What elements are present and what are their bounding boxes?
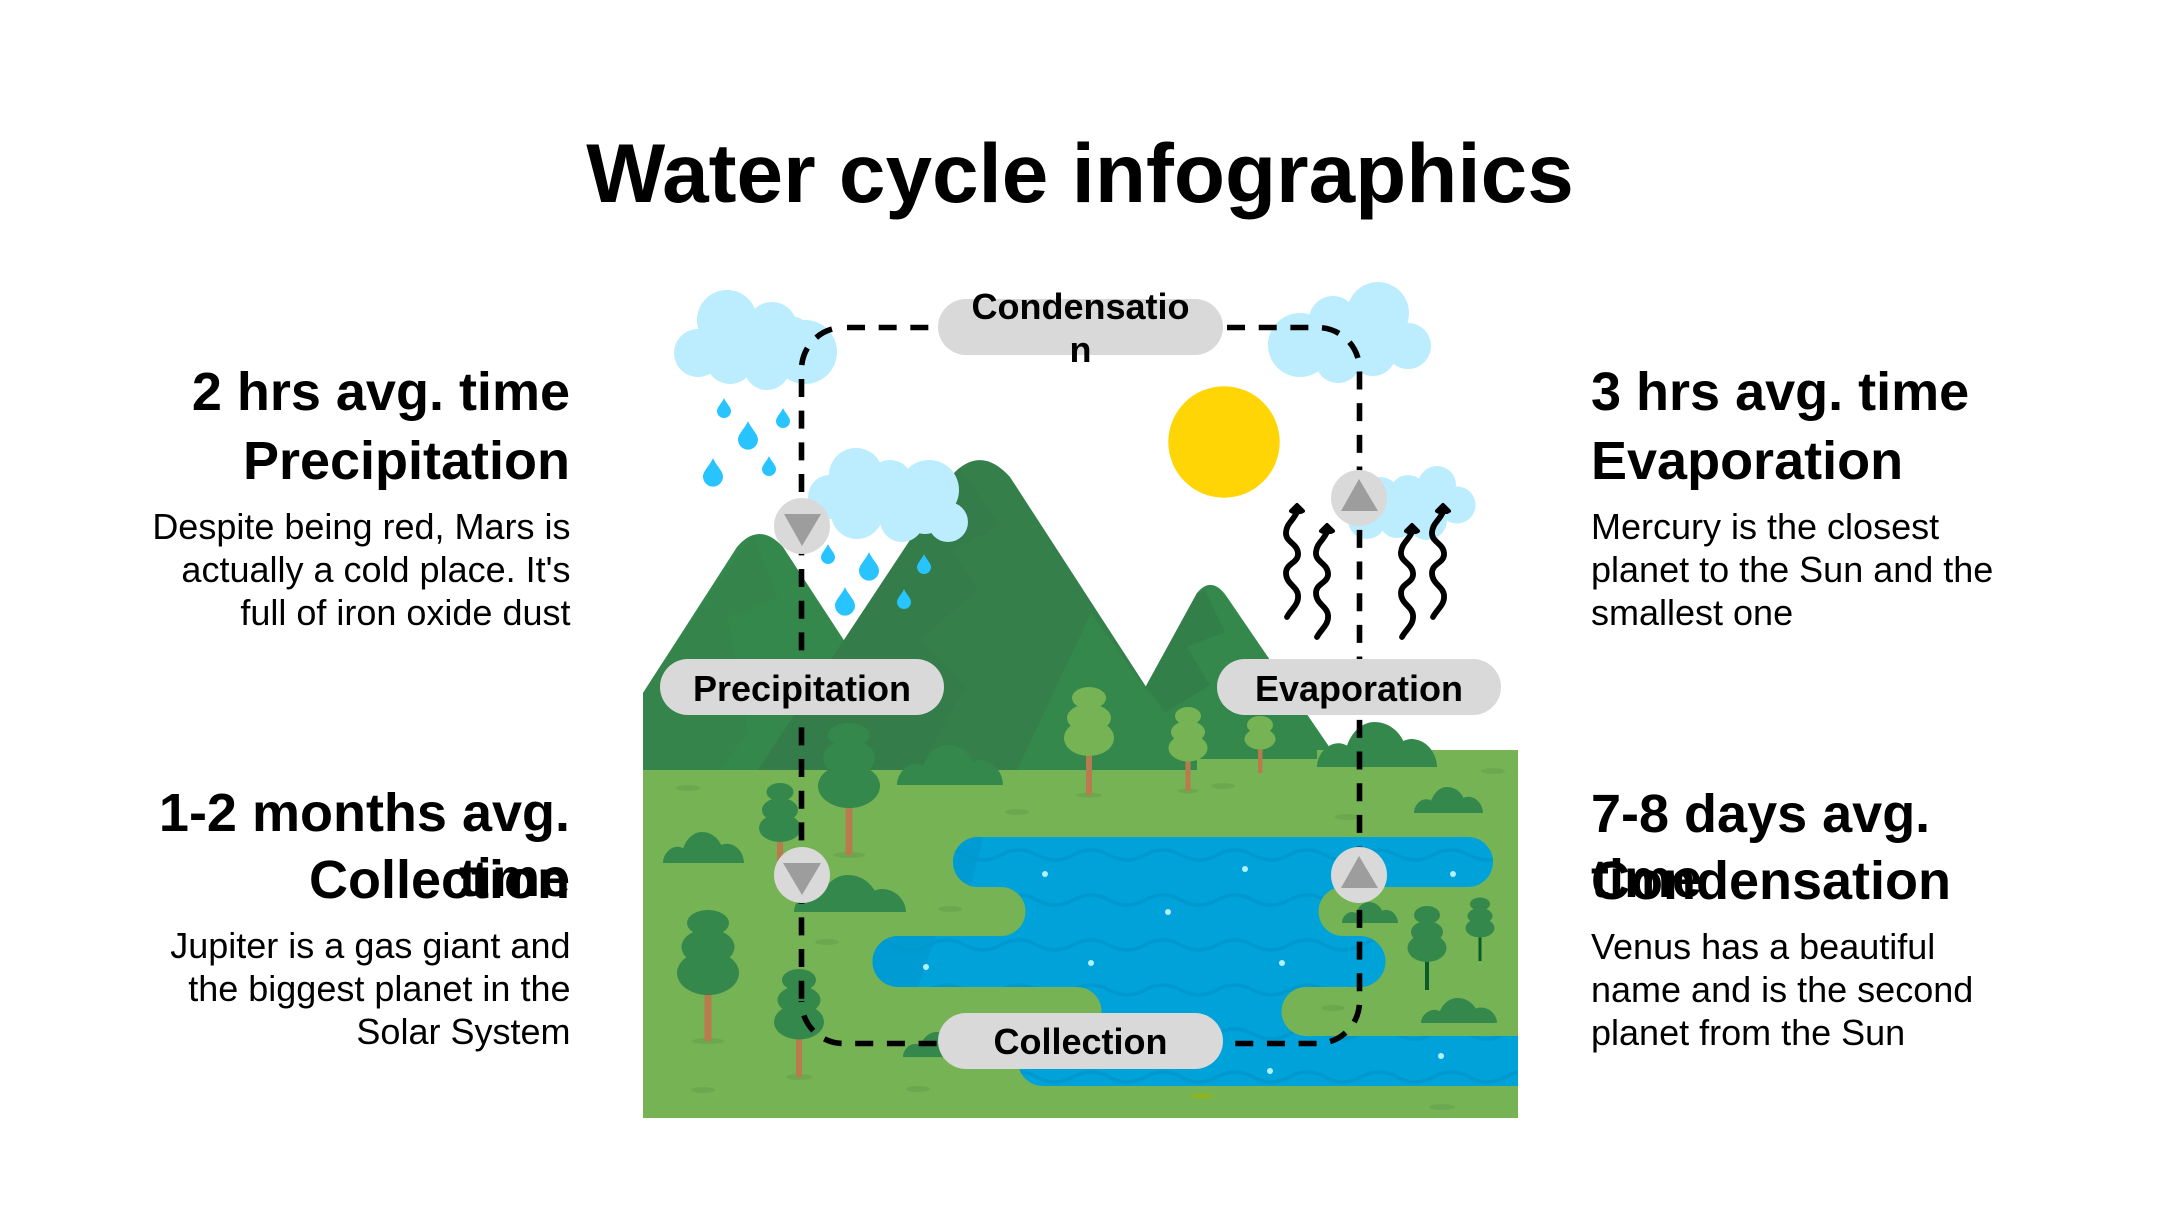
label: evaporation: Evaporation: [1255, 668, 1463, 709]
heading: precipitation time: Precipitation: [243, 431, 570, 491]
cloud: evaporation: [1348, 466, 1476, 540]
heading: condensation time: time: [1591, 849, 1702, 909]
title: Water cycle infographics: [586, 126, 1574, 220]
cloud: middle: [808, 448, 968, 542]
description: condensation: [1591, 926, 1973, 1053]
heading: precipitation time: [192, 362, 570, 491]
panel: evaporation text: [1591, 362, 1993, 633]
heading: condensation time: [1591, 784, 1951, 911]
arrow: squiggle three: [1401, 525, 1418, 637]
heading: collection time: Collection: [309, 850, 570, 910]
tree: right small: [1466, 898, 1494, 961]
heading: condensation time: Condensation: [1591, 851, 1951, 911]
heading: evaporation time: Evaporation: [1591, 431, 1903, 491]
panel: condensation text: [1591, 784, 1973, 1053]
tree: far left: [677, 910, 739, 1044]
description: precipitation: actually a cold place. It's: [181, 549, 570, 590]
label: condensation: n: [1070, 329, 1092, 370]
description: collection: Jupiter is a gas giant and: [170, 925, 570, 966]
dashed cycle path: [801, 327, 1360, 1044]
bushes: [663, 722, 1497, 1057]
ground: [643, 750, 1518, 1118]
heading: collection time: time: [459, 848, 570, 908]
description: condensation: name and is the second: [1591, 969, 1973, 1010]
raindrops: top left: [703, 398, 790, 487]
tree: tall near path: [818, 723, 880, 858]
arrow: squiggle two: [1316, 525, 1333, 637]
label: condensation: [938, 286, 1223, 370]
mountain: middle: [758, 460, 1152, 770]
heading: collection time: [159, 783, 570, 910]
description: condensation: planet from the Sun: [1591, 1012, 1905, 1053]
description: precipitation: full of iron oxide dust: [240, 592, 570, 633]
heading: condensation time: 7-8 days avg.: [1591, 784, 1930, 844]
description: evaporation: planet to the Sun and the: [1591, 549, 1993, 590]
heading: collection time: 1-2 months avg.: [159, 783, 570, 843]
tree: light three: [1244, 716, 1276, 773]
description: evaporation: smallest one: [1591, 592, 1793, 633]
description: precipitation: [152, 506, 570, 633]
heading: evaporation time: 3 hrs avg. time: [1591, 362, 1969, 422]
tree: light two: [1168, 707, 1208, 794]
description: evaporation: [1591, 506, 1993, 633]
heading: precipitation time: 2 hrs avg. time: [192, 362, 570, 422]
lake and river: [857, 830, 1541, 1086]
label: collection: Collection: [993, 1021, 1168, 1062]
tree: upper path: [759, 783, 801, 865]
heading: evaporation time: [1591, 362, 1969, 491]
cloud: top left: [674, 290, 837, 390]
label: precipitation: [660, 659, 944, 715]
label: condensation: Condensatio: [971, 286, 1190, 327]
trees: [677, 687, 1494, 1080]
tree: right large: [1408, 906, 1446, 990]
description: collection: Solar System: [356, 1011, 570, 1052]
arrow badge: condensation up: [1331, 847, 1387, 903]
panel: collection text: [159, 783, 570, 1052]
arrow badge: collection down: [774, 847, 830, 903]
label: evaporation: [1217, 659, 1501, 715]
label: collection: [938, 1013, 1223, 1069]
illustration: landscape: [643, 460, 1541, 1118]
arrow badge: evaporation up: [1331, 470, 1387, 526]
description: condensation: Venus has a beautiful: [1591, 926, 1935, 967]
evaporation squiggle arrows: [1286, 505, 1449, 637]
grass patches: [676, 768, 1505, 1110]
cloud: top right: [1268, 282, 1431, 383]
raindrops: middle: [821, 544, 931, 616]
tree: lower path: [774, 969, 824, 1080]
arrow: squiggle one: [1286, 505, 1303, 617]
panel: precipitation text: [152, 362, 570, 633]
mountain: left: [643, 534, 844, 770]
description: collection: the biggest planet in the: [188, 968, 570, 1009]
tree: light one: [1064, 687, 1114, 798]
description: precipitation: Despite being red, Mars is: [152, 506, 570, 547]
arrow badge: precipitation down: [774, 498, 830, 554]
mountain: right: [1146, 584, 1329, 765]
description: evaporation: Mercury is the closest: [1591, 506, 1939, 547]
label: precipitation: Precipitation: [693, 668, 911, 709]
arrow: squiggle four: [1432, 505, 1449, 617]
sun: [1168, 386, 1280, 498]
description: collection: [170, 925, 570, 1052]
